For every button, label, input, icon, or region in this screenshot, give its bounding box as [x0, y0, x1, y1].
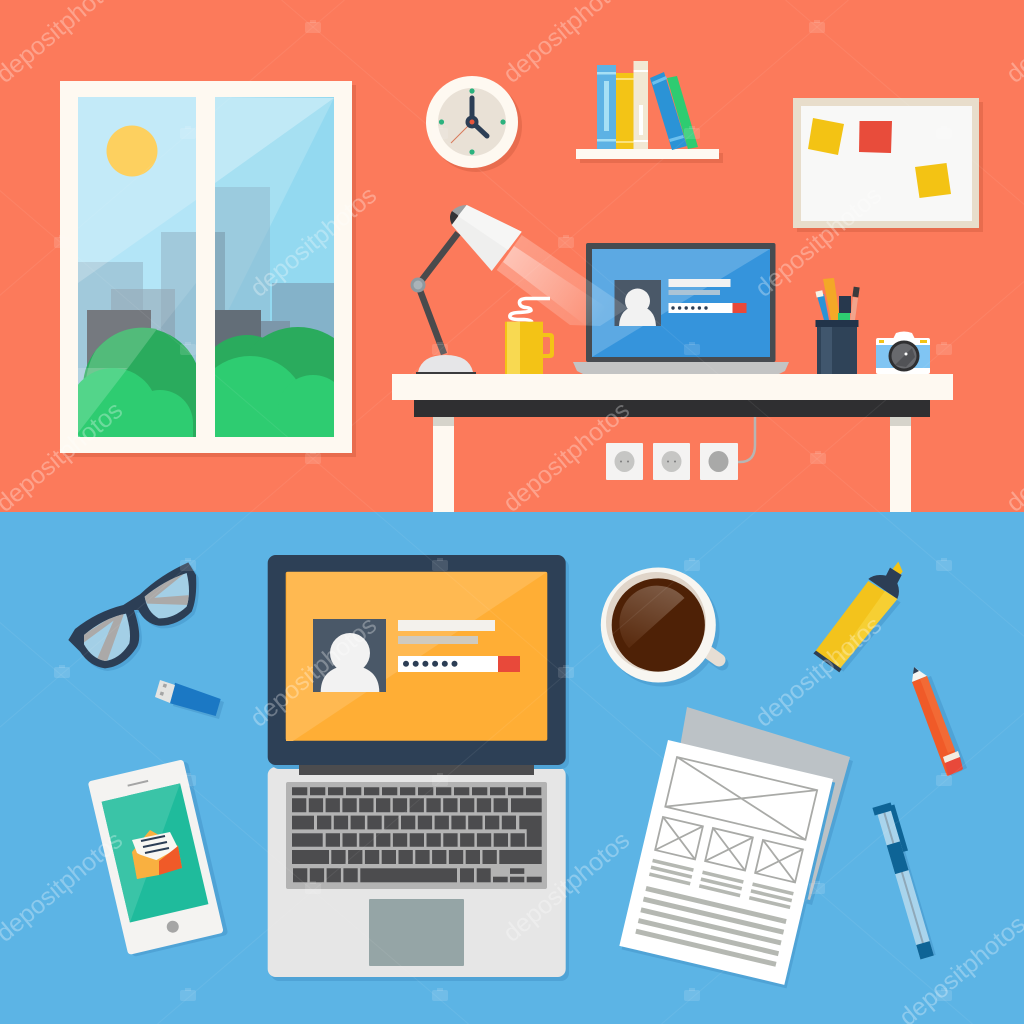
USB flash drive [155, 680, 224, 719]
ballpoint pen [872, 802, 939, 960]
sticky notes [808, 118, 951, 198]
desk lamp [410, 205, 522, 374]
panel: blue desktop surface [0, 512, 1024, 1024]
orange screen [286, 572, 547, 741]
pencil holder [815, 278, 860, 374]
glasses [68, 562, 199, 671]
camera [876, 332, 930, 374]
light beam [497, 235, 628, 326]
login form [313, 619, 520, 692]
login form [614, 279, 746, 326]
smartphone with mail icon [88, 758, 228, 958]
keyboard [286, 782, 547, 889]
coffee cup, top view [601, 568, 722, 686]
wireframe papers [619, 707, 853, 988]
envelope icon [132, 830, 182, 879]
small laptop on desk [573, 243, 789, 374]
left pane view [78, 97, 196, 437]
watermarks: depositphotos [750, 181, 887, 303]
orange pencil [912, 667, 967, 776]
coffee mug with steam [505, 298, 554, 374]
watermarks: depositphotos [245, 611, 382, 733]
trackpad [369, 899, 464, 966]
watermarks: depositphotos [498, 826, 635, 948]
watermarks: depositphotos [750, 611, 887, 733]
highlighter [813, 562, 903, 672]
bookshelf with books [576, 61, 723, 163]
large laptop, top view [268, 555, 569, 981]
window [60, 81, 362, 470]
power outlets with plug [606, 417, 755, 480]
desk [392, 374, 953, 512]
text lines [635, 859, 794, 967]
watermarks: depositphotos [245, 181, 382, 303]
pin board with sticky notes [793, 98, 983, 232]
right pane view [215, 97, 334, 437]
wall clock [426, 76, 522, 172]
panel: orange office wall [0, 0, 1024, 512]
hero image placeholder [655, 757, 817, 883]
books [597, 61, 698, 150]
watermarks: depositphotos [498, 396, 635, 518]
